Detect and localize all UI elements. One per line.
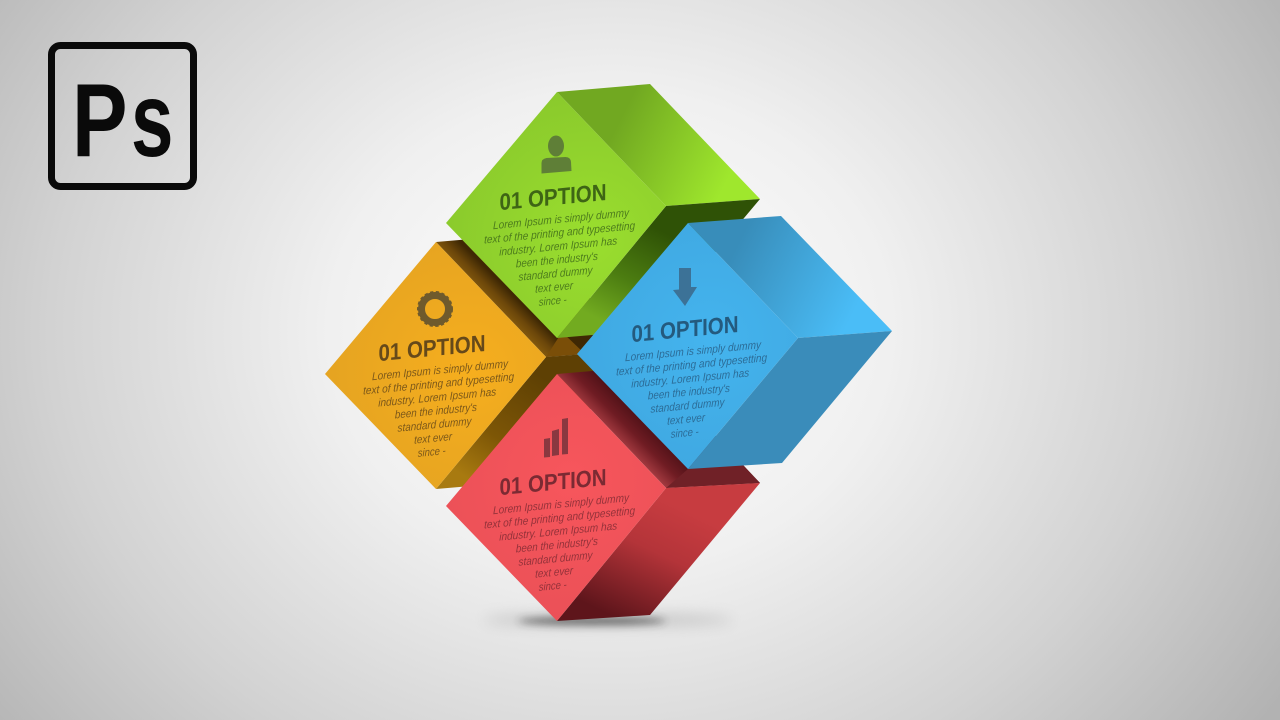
green heading and text: text ever xyxy=(535,280,574,296)
red heading and text: been the industry's xyxy=(516,536,598,556)
green top side xyxy=(557,84,760,206)
ground shadow xyxy=(483,613,733,627)
red heading and text: Lorem Ipsum is simply dummy xyxy=(493,492,630,517)
red top side strip xyxy=(666,463,760,488)
blue heading and text: been the industry's xyxy=(648,383,730,403)
green heading and text: been the industry's xyxy=(516,251,598,271)
blue top side xyxy=(688,216,892,338)
icon: gear xyxy=(418,292,452,326)
orange heading and text: since - xyxy=(418,445,446,460)
panel: blue cube xyxy=(577,216,892,469)
blue heading and text: Lorem Ipsum is simply dummy xyxy=(625,339,762,364)
red heading and text xyxy=(484,461,636,599)
green heading and text: Lorem Ipsum is simply dummy xyxy=(493,207,630,232)
green heading and text: since - xyxy=(539,294,567,309)
icon: Photoshop logo xyxy=(52,46,194,186)
orange top side junction xyxy=(546,332,585,357)
icon: bar chart xyxy=(544,418,568,458)
red heading and text: since - xyxy=(539,579,567,594)
orange right side xyxy=(436,350,640,489)
blue heading and text: standard dummy xyxy=(651,397,726,416)
green front face xyxy=(446,92,666,338)
orange heading and text xyxy=(363,327,515,465)
blue right side xyxy=(688,331,892,469)
red heading and text: 01 OPTION xyxy=(500,464,606,500)
blue heading and text: text of the printing and typesetting xyxy=(616,352,768,379)
green heading and text xyxy=(484,176,636,314)
icon: Photoshop logo: s xyxy=(131,60,173,179)
orange heading and text: standard dummy xyxy=(398,416,473,435)
orange heading and text: text ever xyxy=(414,431,453,447)
orange heading and text: Lorem Ipsum is simply dummy xyxy=(372,358,509,383)
red front face xyxy=(446,374,666,621)
blue heading and text: 01 OPTION xyxy=(632,311,738,347)
red right side xyxy=(557,483,760,621)
icon: down arrow xyxy=(673,268,697,306)
blue heading and text: since - xyxy=(671,426,699,441)
green heading and text: 01 OPTION xyxy=(500,179,606,215)
orange heading and text: text of the printing and typesetting xyxy=(363,371,515,398)
blue heading and text: text ever xyxy=(667,412,706,428)
icon: Photoshop logo: P xyxy=(72,62,127,178)
blue front face xyxy=(577,223,798,469)
red heading and text: standard dummy xyxy=(519,550,594,569)
orange front face xyxy=(325,242,546,489)
panel: orange cube xyxy=(325,234,640,489)
green right side xyxy=(557,199,760,338)
red heading and text: industry. Lorem Ipsum has xyxy=(499,520,618,544)
green heading and text: text of the printing and typesetting xyxy=(484,220,636,247)
green heading and text: industry. Lorem Ipsum has xyxy=(499,235,618,259)
red top side xyxy=(557,366,760,488)
orange heading and text: been the industry's xyxy=(395,402,477,422)
blue heading and text xyxy=(616,308,768,446)
red heading and text: text of the printing and typesetting xyxy=(484,505,636,532)
orange top side xyxy=(436,234,640,357)
icon: person xyxy=(542,136,572,174)
panel: green cube xyxy=(446,84,760,338)
orange heading and text: 01 OPTION xyxy=(378,330,486,366)
blue heading and text: industry. Lorem Ipsum has xyxy=(631,367,750,391)
panel: red cube xyxy=(446,366,760,621)
red heading and text: text ever xyxy=(535,565,574,581)
green heading and text: standard dummy xyxy=(519,265,594,284)
orange heading and text: industry. Lorem Ipsum has xyxy=(378,386,497,410)
